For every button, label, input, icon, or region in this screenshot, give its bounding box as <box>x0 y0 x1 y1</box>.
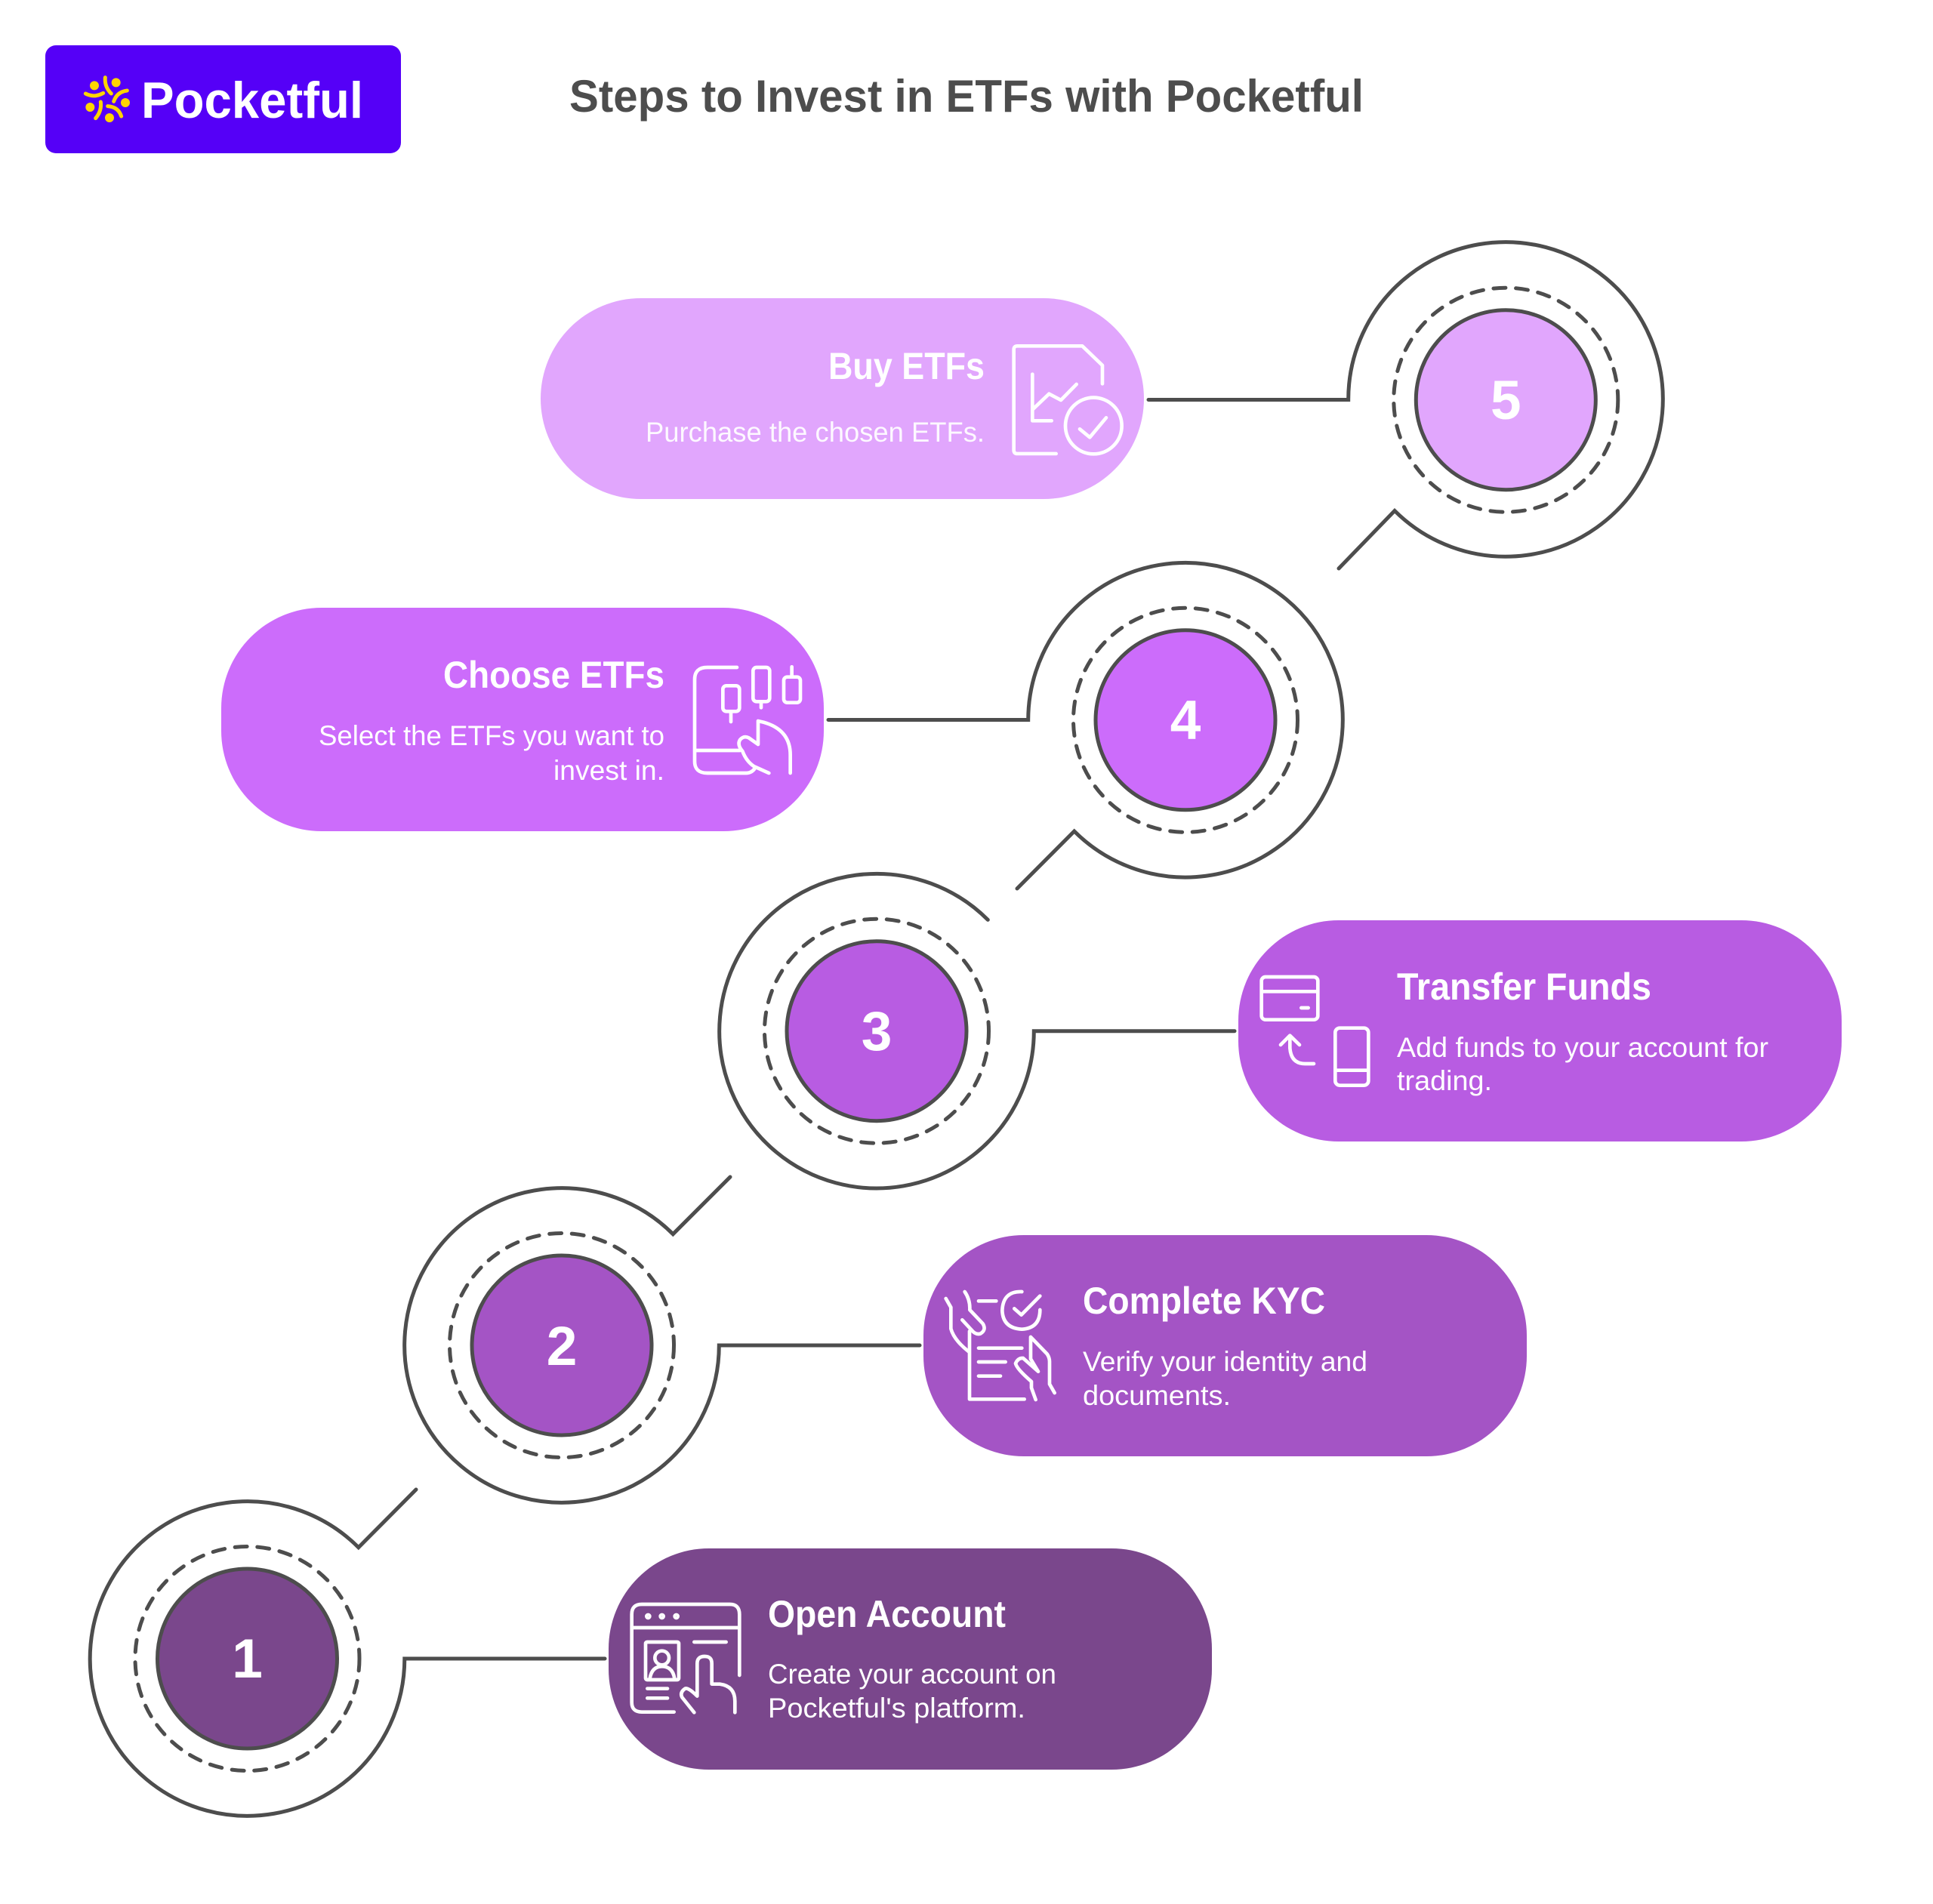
heading: Open Account <box>768 1593 1006 1635</box>
description <box>319 720 664 786</box>
step 5 <box>541 242 1663 568</box>
dashed ring <box>135 1546 359 1771</box>
number badge 1 <box>157 1569 337 1748</box>
description <box>1397 1032 1768 1096</box>
number badge 5 <box>1416 310 1595 490</box>
number badge 5: 5 <box>1491 370 1521 431</box>
connector and ring <box>720 873 1235 1188</box>
number badge 3: 3 <box>862 1001 892 1062</box>
logo <box>45 45 401 153</box>
dashed ring <box>450 1234 674 1457</box>
icon: document with chart and check <box>1014 346 1122 454</box>
panel: Complete KYC <box>923 1235 1527 1456</box>
title: Steps to Invest in ETFs with Pocketful <box>569 71 1364 122</box>
connector and ring <box>90 1490 605 1816</box>
description: Verify your identity and <box>1083 1346 1367 1377</box>
number badge 3 <box>787 941 966 1121</box>
dashed ring <box>764 919 989 1143</box>
logo wordmark: Pocketful <box>141 72 363 129</box>
number badge 1: 1 <box>232 1628 263 1690</box>
heading: Buy ETFs <box>828 345 985 387</box>
icon: card and phone transfer <box>1262 977 1368 1086</box>
number badge 4 <box>1096 630 1275 810</box>
icon: browser profile with pointer <box>632 1604 739 1712</box>
panel: Buy ETFs <box>541 298 1144 499</box>
icon: logo mark <box>85 78 130 122</box>
heading: Complete KYC <box>1083 1280 1325 1322</box>
panel: Open Account <box>609 1548 1212 1770</box>
heading: Transfer Funds <box>1397 966 1651 1008</box>
description: invest in. <box>553 755 664 786</box>
number badge 2: 2 <box>547 1316 577 1377</box>
panel: Choose ETFs <box>221 608 824 831</box>
panel: Transfer Funds <box>1238 920 1842 1141</box>
heading: Choose ETFs <box>443 654 664 696</box>
number badge 2 <box>472 1255 652 1435</box>
icon: hands with checklist <box>946 1292 1055 1400</box>
step 2 <box>405 1177 1527 1502</box>
description: Create your account on <box>768 1659 1056 1690</box>
step 1 <box>90 1490 1212 1816</box>
number badge 4: 4 <box>1170 690 1201 751</box>
description: documents. <box>1083 1380 1231 1411</box>
icon: candlesticks on phone <box>695 667 800 773</box>
description: Select the ETFs you want to <box>319 720 664 751</box>
dashed ring <box>1394 288 1618 512</box>
description <box>1083 1346 1367 1411</box>
description: Add funds to your account for <box>1397 1032 1768 1063</box>
description: trading. <box>1397 1065 1492 1096</box>
description <box>768 1659 1056 1724</box>
step 4 <box>221 562 1343 889</box>
connector and ring <box>405 1177 920 1502</box>
description: Purchase the chosen ETFs. <box>646 417 985 448</box>
connector and ring <box>1148 242 1663 568</box>
description: Pocketful's platform. <box>768 1693 1025 1724</box>
dashed ring <box>1074 608 1297 832</box>
step 3 <box>720 873 1842 1188</box>
connector and ring <box>828 562 1343 889</box>
